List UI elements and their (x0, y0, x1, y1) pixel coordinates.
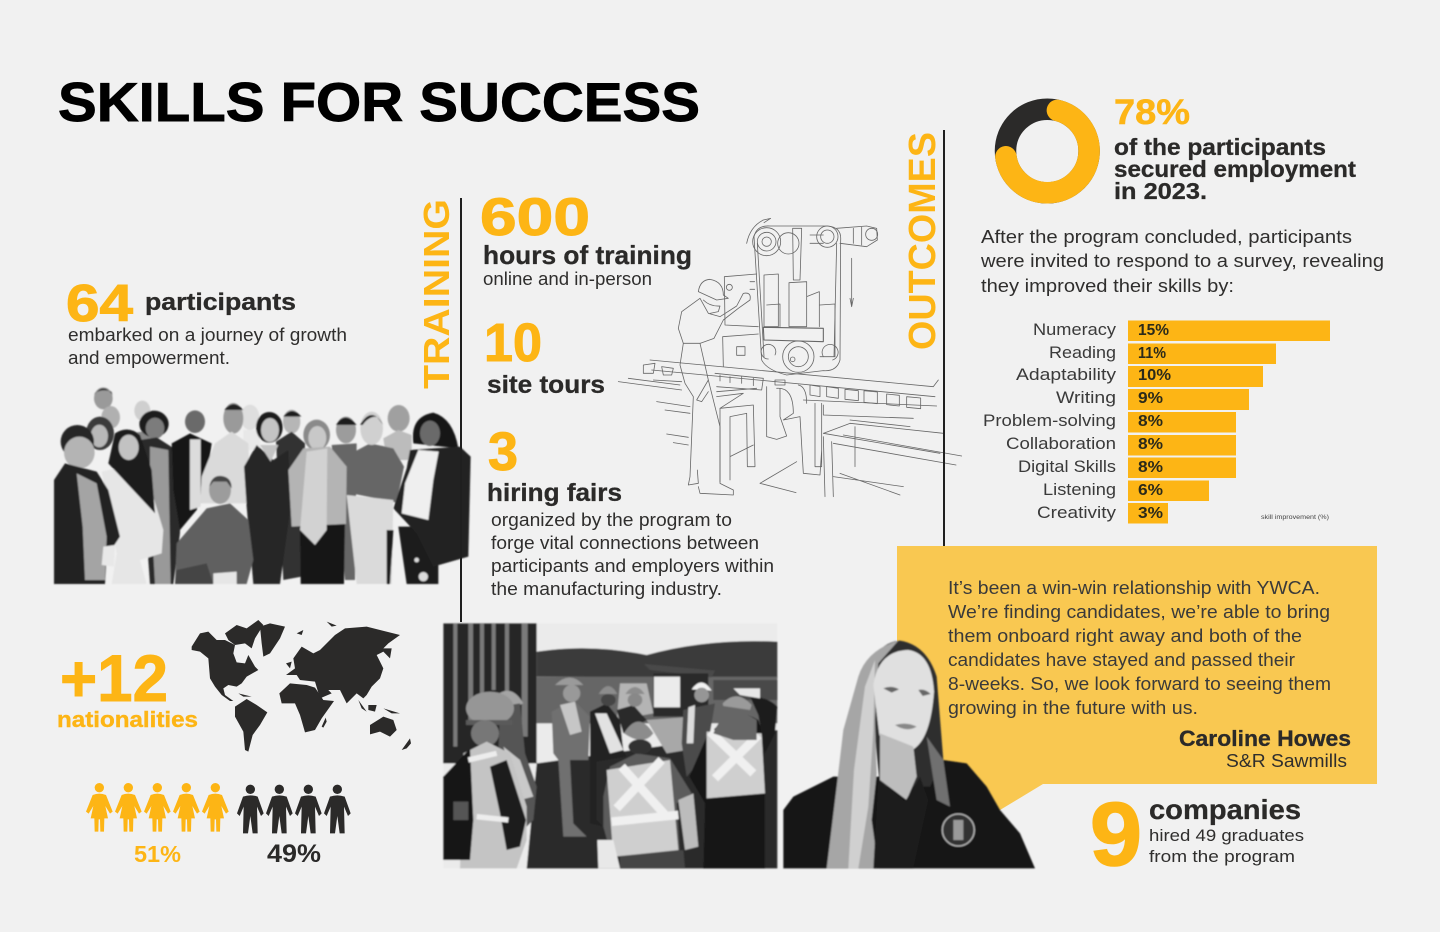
employment stat: 78% (1114, 93, 1190, 132)
bar chart: skill improvement: Listening (1043, 480, 1116, 499)
bar chart: skill improvement: 8% (1138, 413, 1163, 430)
employment stat: of the participants (1114, 134, 1326, 160)
bar chart: skill improvement: 11% (1138, 345, 1166, 362)
companies stat: hired 49 graduates (1149, 826, 1304, 845)
testimonial callout: It’s been a win-win relationship with YWCA. (948, 578, 1320, 598)
companies stat (1090, 785, 1304, 885)
bar chart: skill improvement: 3% (1138, 505, 1163, 522)
training stats: organized by the program to (491, 510, 732, 530)
outcomes label: OUTCOMES (902, 132, 944, 350)
bar chart: skill improvement: Reading (1049, 343, 1116, 362)
bar chart: skill improvement: 6% (1138, 482, 1163, 499)
survey text (980, 226, 1384, 296)
nationalities stat: +12 (60, 641, 168, 715)
donut chart: 78 percent (1006, 109, 1089, 193)
bar chart: skill improvement: Digital Skills (1018, 457, 1116, 476)
companies stat: from the program (1149, 847, 1295, 866)
machinery line illustration (618, 218, 962, 497)
world map (192, 620, 411, 752)
companies stat: companies (1149, 794, 1301, 825)
training stats: online and in-person (483, 269, 652, 289)
bar chart: skill improvement: Problem-solving (983, 411, 1116, 430)
participants stat: embarked on a journey of growth (68, 325, 347, 345)
bar chart: skill improvement: Numeracy (1033, 320, 1117, 339)
nationalities stat (57, 641, 198, 732)
training stats: participants and employers within (491, 556, 774, 576)
gender icons: 51 percent (86, 783, 229, 832)
bar chart: skill improvement: 15% (1138, 322, 1169, 339)
employment stat: in 2023. (1114, 178, 1207, 204)
employment stat: secured employment (1114, 156, 1356, 182)
bar chart: skill improvement: Creativity (1037, 503, 1117, 522)
portrait photo (783, 641, 1035, 868)
survey text: After the program concluded, participants (981, 226, 1352, 247)
training stats: 600 (480, 188, 590, 247)
participants stat: and empowerment. (68, 348, 230, 368)
employment stat (1114, 93, 1356, 204)
participants stat: 64 (66, 275, 133, 333)
bar chart: skill improvement: 10% (1138, 367, 1171, 384)
participants stat (66, 275, 347, 368)
bar chart: skill improvement: Adaptability (1016, 365, 1117, 384)
participants stat: participants (145, 289, 296, 316)
bar chart: skill improvement (983, 320, 1330, 524)
bar chart: skill improvement: Writing (1056, 388, 1116, 407)
training stats: hiring fairs (487, 479, 622, 507)
title: SKILLS FOR SUCCESS (58, 71, 700, 133)
training stats (480, 188, 774, 599)
testimonial callout: them onboard right away and both of the (948, 626, 1302, 646)
survey text: they improved their skills by: (981, 275, 1234, 296)
testimonial callout: We’re finding candidates, we’re able to bring (948, 602, 1330, 622)
testimonial callout: candidates have stayed and passed their (948, 650, 1295, 670)
training label: TRAINING (416, 199, 457, 389)
bar chart: skill improvement: Collaboration (1006, 434, 1116, 453)
nationalities stat: nationalities (57, 707, 198, 732)
training stats: 10 (484, 313, 542, 373)
bar chart: skill improvement: skill improvement (%) (1261, 514, 1329, 521)
testimonial callout: S&R Sawmills (1226, 751, 1347, 771)
group photo (54, 387, 471, 584)
51 percent label: 51% (134, 841, 181, 867)
bar chart: skill improvement: 9% (1138, 390, 1163, 407)
testimonial callout: 8-weeks. So, we look forward to seeing them (948, 674, 1331, 694)
testimonial callout: growing in the future with us. (948, 698, 1198, 718)
companies stat: 9 (1090, 785, 1142, 885)
training stats: site tours (487, 371, 605, 399)
divider: outcomes (943, 130, 945, 546)
training stats: hours of training (483, 240, 692, 270)
49 percent label: 49% (267, 840, 321, 868)
bar chart: skill improvement: 8% (1138, 459, 1163, 476)
training stats: forge vital connections between (491, 533, 759, 553)
divider: training (460, 198, 462, 622)
training stats: the manufacturing industry. (491, 579, 722, 599)
gender icons: 49 percent (237, 785, 351, 833)
training stats: 3 (488, 422, 518, 482)
testimonial callout: Caroline Howes (1179, 726, 1351, 751)
bar chart: skill improvement: 8% (1138, 436, 1163, 453)
testimonial callout (897, 546, 1377, 830)
survey text: were invited to respond to a survey, revealing (980, 250, 1384, 271)
site visit photo (443, 623, 777, 868)
